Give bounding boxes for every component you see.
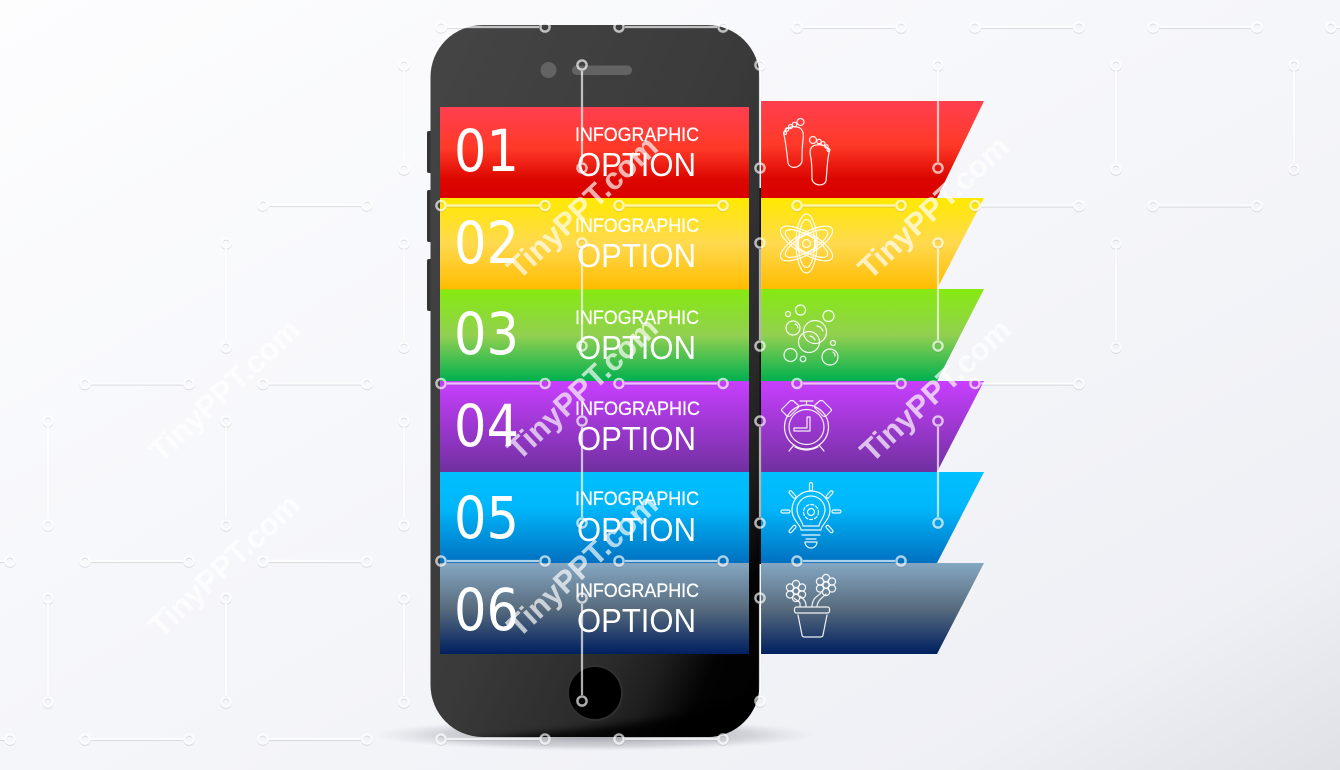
option 05 text: 05 [454,485,519,552]
option 04 text [454,393,700,460]
watermark: TinyPPT.com: TinyPPT.com [142,312,307,469]
icon: alarm clock [782,400,832,451]
option 02 text: INFOGRAPHIC [575,216,699,237]
option 02 text [454,210,699,277]
panel: right side ribbons [761,101,984,654]
option 01 text: INFOGRAPHIC [575,125,699,146]
option 01 text: 01 [454,118,519,185]
watermark: TinyPPT.com: TinyPPT.com [500,487,665,644]
option 05 text: OPTION [577,511,696,548]
panel: phone screen bands [440,107,749,654]
option 03 text: OPTION [577,329,696,366]
home button [568,666,622,720]
option 03 text: INFOGRAPHIC [575,308,699,329]
option 06 text [454,577,699,644]
option 06 text: INFOGRAPHIC [575,581,699,602]
watermark: TinyPPT.com: TinyPPT.com [142,487,307,644]
option 02 text: OPTION [577,237,696,274]
option 04 text: OPTION [577,420,696,457]
option 06 text: 06 [454,577,519,644]
speaker [572,66,632,75]
watermark: TinyPPT.com: TinyPPT.com [851,129,1016,286]
watermark: TinyPPT.com: TinyPPT.com [853,312,1018,469]
phone shadow [373,719,817,751]
option 05 text [454,485,699,552]
icon: flower pot [786,574,836,637]
phone body [427,25,761,760]
option 05 text: INFOGRAPHIC [575,489,699,510]
icon: atom [776,214,837,273]
watermark: TinyPPT.com: TinyPPT.com [500,129,665,286]
option 03 text [454,301,699,368]
option 02 text: 02 [454,210,519,277]
option 04 text: 04 [454,393,519,460]
camera [540,62,556,78]
option 04 text: INFOGRAPHIC [575,399,700,420]
icon: light bulb with gear [781,482,841,548]
icon: footprints [784,118,830,185]
option 03 text: 03 [454,301,519,368]
icon: bubbles [784,305,838,365]
watermark: TinyPPT.com [142,129,1018,644]
watermark: TinyPPT.com: TinyPPT.com [500,310,665,467]
option 01 text [454,118,699,185]
option 06 text: OPTION [577,602,696,639]
option 01 text: OPTION [577,146,696,183]
